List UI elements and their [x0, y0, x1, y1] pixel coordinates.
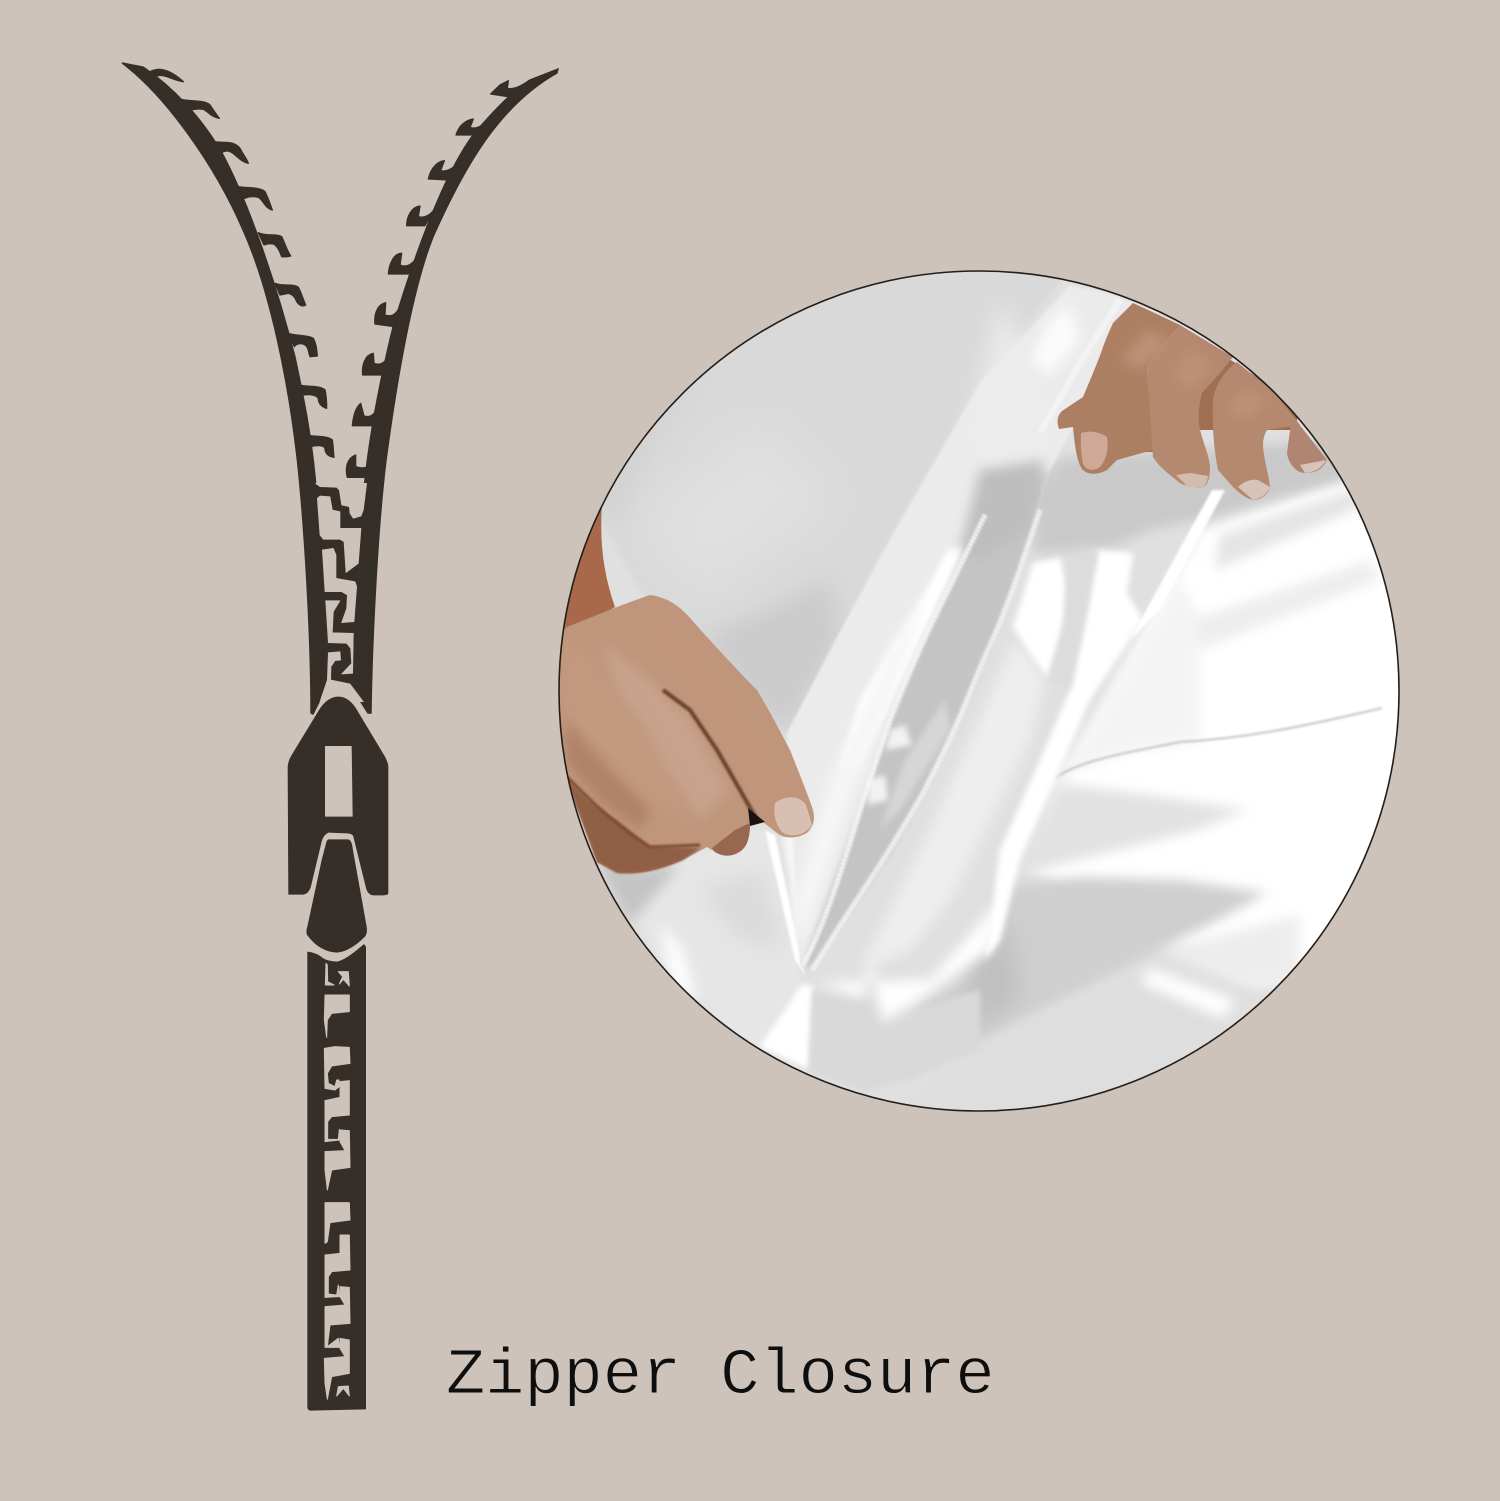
caption: Zipper Closure: Zipper Closure	[446, 1339, 995, 1413]
left zipper tape	[122, 63, 327, 714]
finger curled tip	[712, 823, 750, 856]
infographic: zipper closure	[122, 62, 1400, 1411]
white fabric lower right	[1036, 480, 1398, 964]
right zipper tape	[350, 69, 558, 713]
back of hand	[1146, 360, 1298, 452]
left hand	[550, 505, 814, 873]
mid shadow in fabric	[1030, 782, 1239, 871]
finger nails	[1081, 432, 1108, 470]
zipper slider	[288, 697, 388, 953]
finger three	[1213, 362, 1300, 500]
white highlight left of channel	[852, 548, 961, 728]
interlocked teeth	[313, 483, 368, 702]
finger highlights	[1124, 331, 1252, 411]
white highlight right of channel	[1013, 558, 1067, 677]
right hand fingers	[1058, 303, 1327, 500]
large lower shadow	[922, 872, 1300, 1039]
zipper channel shadow	[803, 470, 1050, 970]
pillow upper surface	[602, 370, 855, 731]
photo circle outline	[559, 271, 1399, 1111]
zipper pull tab	[306, 839, 367, 953]
closed zipper section	[307, 944, 366, 1411]
lower finger	[565, 775, 700, 873]
fabric fold with zipper	[787, 285, 1225, 970]
shadow under the fingers	[1033, 440, 1350, 553]
right zipper teeth	[346, 80, 530, 477]
wrist behind pillow	[564, 508, 615, 629]
left zipper teeth	[150, 69, 334, 457]
zipper coil left	[803, 515, 985, 965]
finger gap	[663, 690, 757, 820]
icon: zipper	[122, 63, 558, 1411]
lower left fabric	[598, 830, 992, 1069]
soft diagonal streaks	[1190, 490, 1380, 650]
crease line	[1055, 708, 1382, 778]
hand shading	[607, 652, 726, 814]
finger four	[1287, 422, 1327, 473]
finger two	[1147, 325, 1233, 487]
white band right of the fold	[985, 550, 1143, 960]
zipper coil upper	[1040, 300, 1120, 432]
thumbnail	[774, 797, 812, 835]
photo: hands opening zipper on white pillow	[550, 260, 1420, 1120]
hand silhouette	[555, 595, 814, 873]
zipper coil right	[812, 510, 1040, 970]
finger one	[1058, 303, 1180, 474]
